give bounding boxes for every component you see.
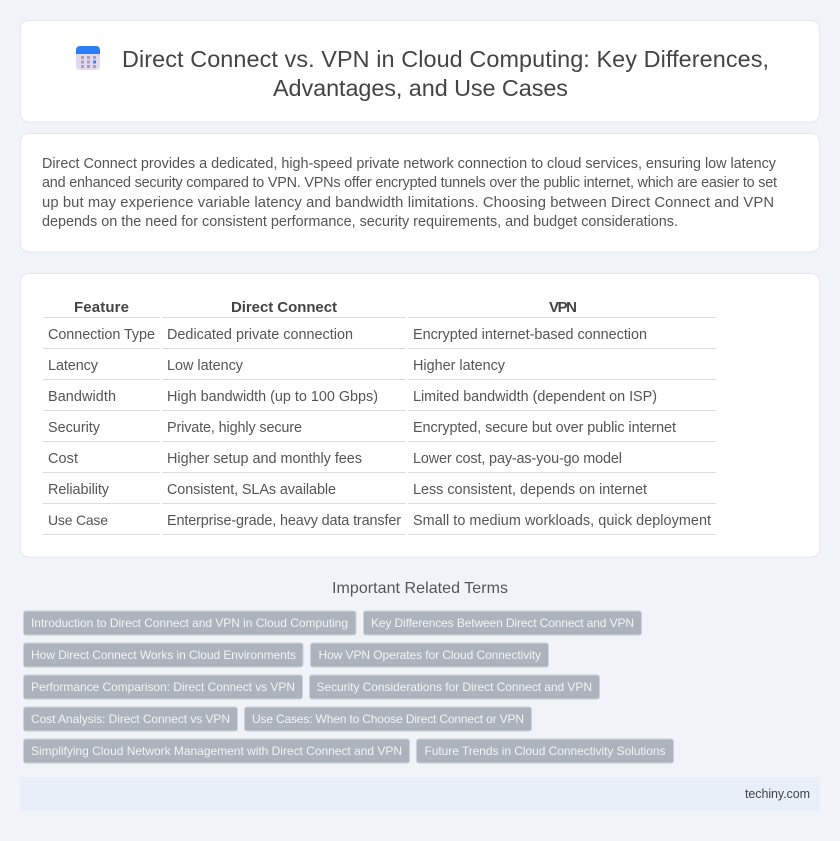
row: security: Security xyxy=(48,420,101,436)
intro paragraph: Direct Connect provides a dedicated, high-speed private network connection to cloud services, ensuring low latency xyxy=(42,156,777,172)
row: security: Private, highly secure xyxy=(167,420,302,436)
intro paragraph: up but may experience variable latency and bandwidth limitations. Choosing between Direct Connect and VPN xyxy=(42,195,774,211)
tag: Future Trends in Cloud Connectivity Solutions xyxy=(424,744,666,758)
panel: comparison table xyxy=(20,274,820,557)
row: latency: Higher latency xyxy=(413,358,506,374)
row: latency: Latency xyxy=(48,358,99,374)
footer xyxy=(20,777,820,811)
row: connection type: Dedicated private connection xyxy=(167,327,353,343)
table header row: VPN xyxy=(549,299,577,316)
intro paragraph: and enhanced security compared to VPN. VPNs offer encrypted tunnels over the public internet, which are easier to set xyxy=(42,175,777,191)
row: cost: Cost xyxy=(48,451,78,467)
row: reliability xyxy=(48,482,647,498)
row: connection type: Encrypted internet-based connection xyxy=(413,327,647,343)
table header row xyxy=(74,299,577,316)
tag: How VPN Operates for Cloud Connectivity xyxy=(318,648,541,662)
row: use case: Small to medium workloads, quick deployment xyxy=(413,513,711,529)
tag xyxy=(244,707,532,731)
footer site name: techiny.com xyxy=(745,787,810,801)
tag: Key Differences Between Direct Connect and VPN xyxy=(371,616,634,630)
tag: Use Cases: When to Choose Direct Connect or VPN xyxy=(252,712,524,726)
row: security xyxy=(48,420,676,436)
row: security: Encrypted, secure but over public internet xyxy=(413,420,676,436)
tag xyxy=(416,739,674,763)
tag: Introduction to Direct Connect and VPN in Cloud Computing xyxy=(31,616,348,630)
panel: title header xyxy=(20,20,820,122)
row: reliability: Consistent, SLAs available xyxy=(167,482,336,498)
row: reliability: Reliability xyxy=(48,482,110,498)
tag xyxy=(24,643,303,667)
tag xyxy=(24,675,302,699)
tag xyxy=(24,739,410,763)
table grid lines xyxy=(43,318,716,534)
intro paragraph: depends on the need for consistent performance, security requirements, and budget considerations. xyxy=(42,214,678,230)
intro paragraph xyxy=(42,156,777,230)
icon: calendar xyxy=(76,46,100,70)
tag: Security Considerations for Direct Connect and VPN xyxy=(316,680,592,694)
tag xyxy=(364,611,642,635)
row: reliability: Less consistent, depends on internet xyxy=(413,482,647,498)
title xyxy=(122,46,769,101)
tag: How Direct Connect Works in Cloud Environments xyxy=(31,648,296,662)
row: cost xyxy=(48,451,622,467)
row: latency xyxy=(48,358,506,374)
row: latency: Low latency xyxy=(167,358,244,374)
row: cost: Higher setup and monthly fees xyxy=(167,451,362,467)
tag xyxy=(24,707,238,731)
row: bandwidth xyxy=(48,389,657,405)
tag: Simplifying Cloud Network Management with Direct Connect and VPN xyxy=(31,744,402,758)
tag xyxy=(310,675,600,699)
row: bandwidth: High bandwidth (up to 100 Gbps) xyxy=(167,389,378,405)
tag xyxy=(24,611,356,635)
heading: important related terms: Important Related Terms xyxy=(332,580,508,597)
row: connection type: Connection Type xyxy=(48,327,155,343)
row: use case xyxy=(48,512,711,529)
row: connection type xyxy=(48,327,647,343)
table header row: Direct Connect xyxy=(231,299,337,316)
row: bandwidth: Bandwidth xyxy=(48,389,116,405)
title: Direct Connect vs. VPN in Cloud Computing: Key Differences, xyxy=(122,46,769,72)
row: use case: Enterprise-grade, heavy data transfer xyxy=(167,513,401,529)
tag xyxy=(310,643,548,667)
row: bandwidth: Limited bandwidth (dependent on ISP) xyxy=(413,389,657,405)
table header row: Feature xyxy=(74,299,129,316)
panel: related term tags xyxy=(24,611,674,763)
title: Advantages, and Use Cases xyxy=(273,75,568,101)
panel: introduction text xyxy=(20,134,820,252)
row: cost: Lower cost, pay-as-you-go model xyxy=(413,451,622,467)
tag: Performance Comparison: Direct Connect vs VPN xyxy=(31,680,295,694)
tag: Cost Analysis: Direct Connect vs VPN xyxy=(31,712,230,726)
row: use case: Use Case xyxy=(48,512,108,528)
